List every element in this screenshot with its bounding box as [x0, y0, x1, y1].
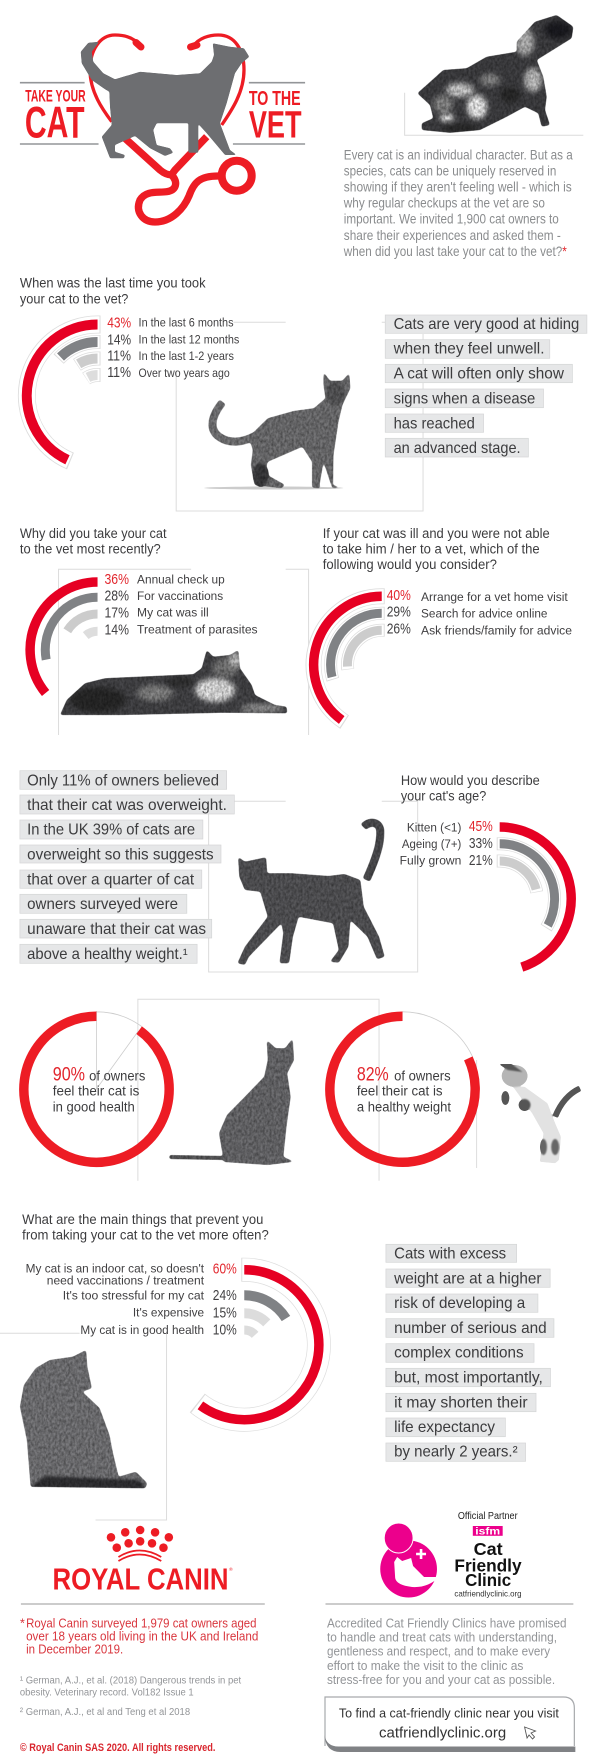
heading: if cat ill: following would you consider?	[323, 556, 497, 572]
logo: royal canin: ®	[229, 1566, 233, 1573]
accreditation text: effort to make the visit to the clinic as	[327, 1658, 524, 1673]
isfm badge: isfm	[475, 1527, 500, 1538]
heading: barriers: What are the main things that prevent you	[22, 1211, 263, 1227]
photo: grey cat from behind	[20, 1350, 147, 1488]
logo headline: take your cat: TAKE YOUR	[25, 88, 86, 106]
highlighted line 8: life expectancy	[394, 1419, 495, 1436]
chart labels: last time at vet: 11%	[107, 365, 131, 381]
chart labels: reason for visit: 36%	[105, 572, 129, 588]
cta text: To find a cat-friendly clinic near you visit	[339, 1705, 559, 1720]
highlighted line 8: above a healthy weight.¹	[27, 946, 188, 963]
highlighted line 5: that over a quarter of cat	[27, 871, 195, 888]
accreditation text: stress-free for you and your cat as possible.	[327, 1672, 555, 1687]
logo: take your cat to the vet	[20, 35, 305, 222]
intro text: share their experiences and asked them -	[344, 228, 561, 243]
accreditation text: gentleness and respect, and to make every	[327, 1644, 551, 1659]
donut text: of owners	[394, 1068, 451, 1084]
chart labels: last time at vet: 43%	[107, 316, 131, 332]
frame: cat from behind	[0, 1333, 167, 1520]
highlighted line 3: A cat will often only show	[394, 366, 565, 383]
heading: if cat ill	[323, 525, 550, 572]
chart labels: cat age: Ageing (7+)	[402, 837, 461, 851]
arc: 14%	[86, 631, 98, 636]
intro text	[343, 147, 573, 259]
chart labels: alternatives: Search for advice online	[421, 607, 548, 621]
chart labels: reason for visit: 28%	[105, 589, 129, 605]
clinic wordmark: Cat	[474, 1539, 503, 1559]
chart labels: alternatives: 40%	[387, 588, 411, 604]
heading: cat age	[401, 772, 540, 804]
chart labels: cat age: 21%	[469, 853, 493, 869]
highlighted line 6: an advanced stage.	[394, 440, 521, 457]
intro text: why regular checkups at the vet are so	[343, 195, 545, 210]
chart labels: cat age: Fully grown	[400, 854, 461, 868]
chart labels: reason for visit: Treatment of parasites	[137, 622, 258, 636]
highlighted line 4: overweight so this suggests	[27, 847, 214, 864]
logo headline: to the vet	[249, 88, 302, 146]
photo: siamese kitten jumping	[499, 1064, 580, 1163]
chart labels: alternatives: 29%	[387, 605, 411, 621]
intro text: species, cats can be uniquely reserved in	[344, 163, 556, 178]
arc: 28%	[45, 597, 98, 660]
chart labels: barriers: 24%	[213, 1288, 237, 1304]
chart labels: cat age	[400, 819, 493, 869]
heading: cat age: your cat's age?	[401, 788, 486, 804]
chart labels: reason for visit: For vaccinations	[137, 589, 223, 603]
heading: if cat ill: If your cat was ill and you were not able	[323, 525, 550, 541]
heading: cat age: How would you describe	[401, 772, 540, 788]
copyright: © Royal Canin SAS 2020. All rights reserved.	[20, 1742, 216, 1754]
references: ¹ German, A.J., et al. (2018) Dangerous trends in pet	[20, 1675, 241, 1686]
donut text: feel their cat is	[53, 1083, 139, 1099]
highlighted line 7: unaware that their cat was	[27, 921, 206, 938]
references: obesity. Veterinary record. Vol182 Issue 1	[20, 1687, 194, 1698]
chart labels: reason for visit: 17%	[105, 606, 129, 622]
heading: why vet	[20, 525, 167, 556]
arc: 26%	[347, 630, 385, 670]
highlighted line 1: Cats with excess	[394, 1245, 506, 1262]
donut text: feel their cat is	[357, 1083, 443, 1099]
chart labels: alternatives	[387, 588, 572, 638]
chart: cat age	[497, 827, 571, 967]
arc: 36%	[30, 582, 98, 693]
chart labels: reason for visit	[105, 572, 258, 638]
photo: fluffy cat lying	[60, 650, 288, 716]
intro text: showing if they aren't feeling well - which is	[344, 179, 572, 194]
heading: last time at vet: your cat to the vet?	[20, 291, 129, 307]
highlighted line 3: risk of developing a	[394, 1295, 526, 1312]
callout: cats hide illness	[385, 315, 587, 457]
arc: 15%	[244, 1313, 267, 1323]
highlighted line 9: by nearly 2 years.²	[394, 1444, 518, 1461]
donut text: of owners	[89, 1068, 145, 1084]
chart labels: last time at vet: 14%	[107, 332, 131, 348]
accreditation text	[327, 1615, 567, 1687]
chart labels: last time at vet	[107, 316, 239, 381]
chart labels: alternatives: Arrange for a vet home visit	[421, 590, 568, 604]
highlighted line 1: Cats are very good at hiding	[394, 316, 579, 333]
clinic url small: catfriendlyclinic.org	[454, 1589, 522, 1599]
chart labels: barriers: My cat is an indoor cat, so doesn't	[26, 1262, 205, 1276]
donut text: 90%	[53, 1065, 85, 1086]
donut text: 82%	[357, 1065, 389, 1086]
arc: 11%	[77, 358, 101, 365]
chart: reason for visit	[30, 582, 98, 693]
donut text	[357, 1065, 451, 1114]
arc: 21%	[497, 861, 537, 892]
highlighted line 7: it may shorten their	[394, 1394, 528, 1411]
logo headline: to the vet: TO THE	[249, 88, 301, 110]
arc: 29%	[331, 613, 385, 680]
clinic wordmark: Clinic	[465, 1570, 511, 1590]
arc: 14%	[59, 342, 101, 359]
highlighted line 4: signs when a disease	[394, 390, 535, 407]
icon: stethoscope	[90, 35, 252, 222]
cta url: catfriendlyclinic.org	[379, 1724, 506, 1741]
arc: 43%	[27, 324, 101, 461]
photo: grey cat walking	[237, 823, 385, 965]
arc: 11% over two years	[86, 375, 101, 378]
frame: walking cat	[209, 801, 418, 972]
logo: royal canin	[52, 1526, 233, 1596]
highlighted line 2: when they feel unwell.	[393, 341, 544, 358]
heading: why vet: Why did you take your cat	[20, 525, 167, 541]
callout: overweight awareness	[20, 771, 234, 963]
highlighted line 2: weight are at a higher	[393, 1270, 541, 1287]
chart labels: barriers: 15%	[213, 1305, 237, 1321]
highlighted line 5: has reached	[394, 415, 475, 432]
chart labels: barriers: 10%	[213, 1322, 237, 1338]
arc: 33%	[497, 844, 555, 928]
footer dividers	[21, 1603, 573, 1605]
chart labels: last time at vet: In the last 6 months	[139, 316, 234, 330]
call to action box	[325, 1697, 575, 1752]
logo headline: take your cat	[25, 88, 86, 147]
donut text: in good health	[53, 1098, 135, 1114]
chart labels: last time at vet: In the last 12 months	[139, 332, 239, 346]
chart labels: reason for visit: My cat was ill	[137, 606, 209, 620]
heading: last time at vet: When was the last time you took	[20, 275, 206, 291]
isfm badge	[473, 1526, 503, 1538]
chart labels: barriers: 60%	[213, 1261, 237, 1277]
donut text	[53, 1065, 145, 1114]
highlighted line 4: number of serious and	[394, 1320, 547, 1337]
logo: official partner cat friendly clinic	[380, 1511, 522, 1599]
heading: if cat ill: to take him / her to a vet, which of the	[323, 540, 540, 557]
accreditation text: to handle and treat cats with understanding,	[327, 1629, 557, 1644]
survey footnote	[20, 1615, 258, 1656]
intro text: when did you last take your cat to the vet?*	[343, 244, 567, 259]
highlighted line 5: complex conditions	[394, 1345, 524, 1362]
chart labels: barriers: It's too stressful for my cat	[63, 1288, 205, 1302]
crown dots	[107, 1526, 173, 1561]
wordmark: ROYAL CANIN	[52, 1561, 229, 1596]
intro text: important. We invited 1,900 cat owners to	[344, 212, 559, 227]
arc: 24%	[244, 1295, 286, 1318]
arc: 60%	[197, 1270, 319, 1420]
survey footnote: over 18 years old living in the UK and Ireland	[26, 1628, 258, 1643]
arc: 17%	[67, 614, 98, 631]
heading: barriers: from taking your cat to the vet more often?	[22, 1226, 269, 1242]
highlighted line 6: owners surveyed were	[27, 896, 178, 913]
logo headline: to the vet: VET	[249, 104, 302, 146]
clinic wordmark	[454, 1539, 522, 1590]
references	[20, 1675, 241, 1718]
donut: 90% good health	[24, 1011, 169, 1162]
arc: 10%	[244, 1330, 255, 1335]
survey footnote: *	[20, 1615, 25, 1630]
chart labels: last time at vet: In the last 1-2 years	[139, 349, 234, 363]
donut text: a healthy weight	[357, 1098, 451, 1114]
icon: cat and person	[380, 1523, 439, 1598]
heading: barriers	[22, 1211, 269, 1242]
donut: 82% healthy weight	[330, 1012, 475, 1162]
highlighted line 2: that their cat was overweight.	[27, 797, 227, 814]
heading: last time at vet	[20, 275, 206, 307]
photo: grey cat sitting	[169, 1038, 294, 1165]
icon: cat silhouette	[81, 42, 249, 158]
frame: cat standing	[176, 322, 423, 511]
chart labels: barriers: It's expensive	[133, 1306, 204, 1320]
heading: why vet: to the vet most recently?	[20, 540, 161, 556]
chart: alternatives if no vet	[314, 596, 385, 722]
arc: 45%	[500, 827, 571, 967]
icon: cursor	[525, 1727, 536, 1739]
logo rules	[20, 83, 305, 144]
chart labels: last time at vet: Over two years ago	[139, 366, 230, 380]
chart labels: barriers: need vaccinations / treatment	[47, 1273, 205, 1287]
chart labels: cat age: Kitten (<1)	[407, 820, 461, 834]
chart labels: reason for visit: 14%	[105, 622, 129, 638]
accreditation text: Accredited Cat Friendly Clinics have promised	[327, 1615, 567, 1630]
chart labels: barriers: My cat is in good health	[80, 1323, 204, 1337]
chart labels: last time at vet: 11%	[107, 348, 131, 364]
chart labels: cat age: 45%	[469, 819, 493, 835]
chart labels: barriers	[26, 1261, 237, 1338]
clinic wordmark: Friendly	[454, 1556, 522, 1576]
chart labels: alternatives: 26%	[387, 622, 411, 638]
intro text: Every cat is an individual character. But as a	[344, 147, 573, 162]
chart: barriers	[197, 1270, 319, 1420]
chart: last time at vet	[27, 324, 101, 461]
chart labels: reason for visit: Annual check up	[137, 572, 225, 586]
logo headline: take your cat: CAT	[25, 98, 85, 147]
photo: grey cat standing	[204, 372, 350, 490]
survey footnote: Royal Canin surveyed 1,979 cat owners aged	[26, 1615, 257, 1630]
official partner label: Official Partner	[458, 1511, 518, 1522]
callout: excess weight risk	[386, 1244, 554, 1461]
chart labels: alternatives: Ask friends/family for advice	[421, 623, 572, 637]
highlighted line 6: but, most importantly,	[394, 1369, 543, 1386]
arc: 40%	[314, 596, 385, 722]
photo: fluffy cat stretching	[405, 10, 583, 135]
frame: lying cat	[59, 569, 309, 735]
highlighted line 1: Only 11% of owners believed	[27, 772, 219, 789]
frame: sitting cat	[138, 999, 477, 1181]
chart labels: cat age: 33%	[469, 836, 493, 852]
survey footnote: in December 2019.	[26, 1641, 123, 1656]
highlighted line 3: In the UK 39% of cats are	[27, 822, 195, 839]
references: ² German, A.J., et al and Teng et al 2018	[20, 1707, 190, 1718]
